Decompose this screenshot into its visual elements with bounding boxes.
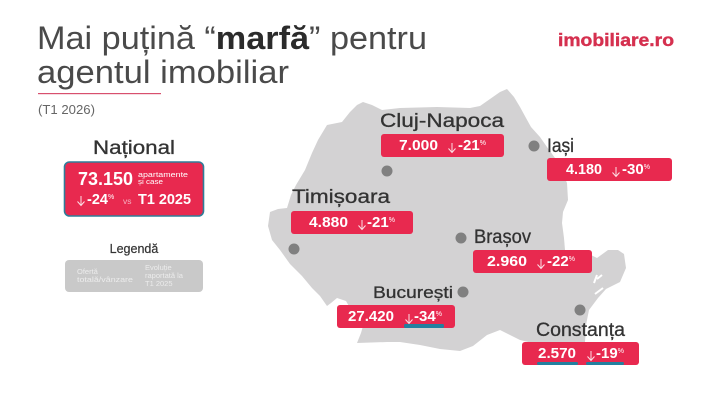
title	[37, 20, 427, 90]
highlight bar	[404, 324, 444, 328]
city: București: %	[436, 311, 442, 318]
city: Timișoara: Timișoara	[292, 187, 391, 208]
city: Brașov: 2.960	[487, 253, 527, 270]
legend left text: totală/vânzare	[77, 275, 133, 284]
city: Brașov: -22	[547, 253, 569, 270]
legend box	[65, 260, 203, 292]
city: Iași: %	[644, 164, 650, 171]
national card	[64, 162, 204, 216]
city: Cluj-Napoca: 7.000	[399, 137, 438, 154]
city: Constanța	[522, 304, 639, 365]
city: București: București	[373, 283, 453, 302]
logo: imobiliare.ro: imobiliare.ro	[558, 30, 674, 50]
panel: national	[64, 138, 204, 216]
city: Constanța: Constanța	[536, 320, 625, 341]
city: București: 27.420	[348, 308, 394, 325]
map of Romania	[268, 89, 626, 351]
highlight bars	[537, 362, 624, 365]
city: Timișoara: %	[389, 217, 395, 224]
national unit label	[138, 172, 188, 186]
city: Iași	[528, 136, 672, 181]
comparison period: T1 2025	[138, 192, 191, 208]
city: Timișoara	[288, 187, 413, 254]
city: Cluj-Napoca: -21	[458, 137, 480, 154]
city: Cluj-Napoca: %	[480, 140, 486, 147]
panel: legend	[65, 242, 203, 292]
city: Cluj-Napoca	[380, 111, 505, 176]
national total: 73.150	[78, 168, 133, 189]
title underline	[38, 93, 161, 94]
national unit label: apartamente	[138, 172, 188, 179]
legend left text: Ofertă	[77, 267, 99, 276]
city: Timișoara: -21	[367, 214, 389, 231]
icon: down arrow	[78, 196, 84, 206]
legend heading: Legendă	[110, 242, 158, 256]
city: Constanța: %	[618, 348, 624, 355]
legend right text: Evoluție	[145, 263, 172, 272]
period subtitle: (T1 2026)	[38, 103, 95, 117]
national change: %	[108, 194, 114, 201]
city: Constanța: -19	[596, 345, 618, 362]
city: Brașov	[456, 227, 592, 273]
legend left text	[77, 267, 133, 284]
city: Brașov: %	[569, 256, 575, 263]
legend right text: raportată la	[145, 271, 184, 280]
city: București	[337, 283, 468, 328]
title: Mai puțină “ marfă” pentru	[37, 20, 427, 56]
legend right text	[145, 263, 184, 288]
title: agentul imobiliar	[37, 54, 289, 90]
city: Iași: Iași	[547, 136, 574, 157]
national change: -24	[87, 192, 108, 208]
city: București: -34	[414, 308, 436, 325]
versus label: vs	[123, 196, 132, 206]
national unit label: și case	[138, 179, 163, 186]
city: Iași: 4.180	[566, 161, 602, 178]
legend right text: T1 2025	[145, 279, 173, 288]
national heading: Național	[93, 138, 175, 159]
city: Iași: -30	[622, 161, 644, 178]
city: Timișoara: 4.880	[309, 214, 348, 231]
city: Constanța: 2.570	[538, 345, 576, 362]
city: Brașov: Brașov	[474, 227, 531, 248]
city: Cluj-Napoca: Cluj-Napoca	[380, 111, 505, 132]
